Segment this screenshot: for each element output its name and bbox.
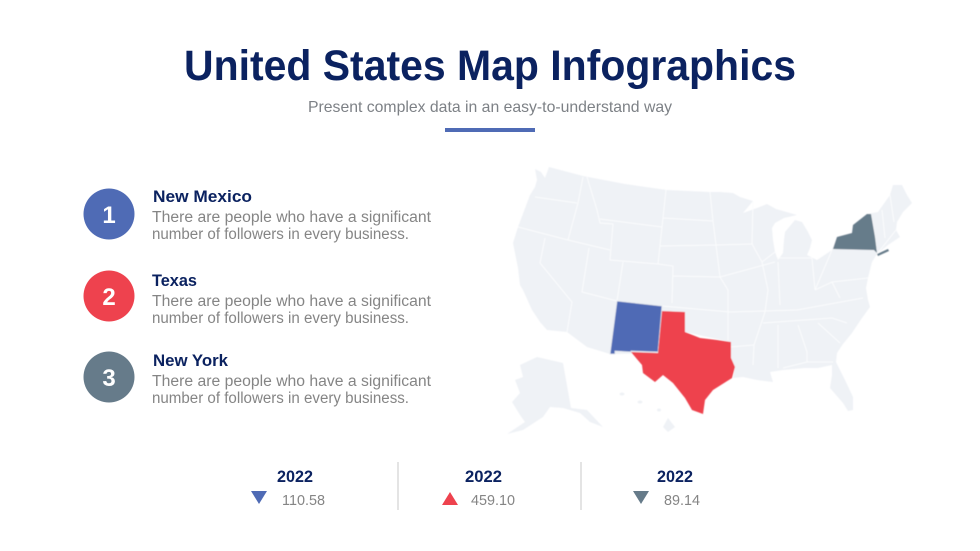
icon: down triangle (251, 491, 267, 504)
stat: New York (633, 467, 700, 509)
stat: New Mexico: 110.58 (282, 492, 325, 509)
title: United States Map Infographics (184, 42, 796, 90)
heading: New York: New York (153, 351, 229, 370)
title underline (445, 128, 535, 132)
state: New York (833, 214, 889, 256)
subtitle: Present complex data in an easy-to-understand way (308, 99, 672, 116)
divider (580, 462, 582, 510)
heading: New Mexico: New Mexico (153, 187, 252, 206)
stat: New York: 89.14 (664, 492, 700, 509)
list item: Texas (84, 270, 432, 327)
badge 2 (84, 270, 134, 322)
badge 1: 1 (102, 202, 116, 229)
icon: down triangle (633, 491, 649, 504)
badge 2: 2 (102, 284, 116, 311)
stat: New Mexico: 2022 (277, 467, 313, 486)
contiguous states base (513, 167, 912, 411)
state: New Mexico (610, 301, 662, 354)
stat: Texas: 2022 (465, 467, 502, 486)
description: number of followers in every business. (152, 310, 409, 327)
badge 3: 3 (102, 365, 116, 392)
stat: New York: 2022 (657, 467, 693, 486)
description: number of followers in every business. (152, 390, 409, 407)
description: There are people who have a significant (152, 209, 432, 226)
badge 1 (84, 188, 134, 240)
stat: Texas (442, 467, 515, 509)
stat: Texas: 459.10 (471, 492, 515, 509)
description: number of followers in every business. (152, 226, 409, 243)
divider (397, 462, 399, 510)
description (152, 373, 432, 407)
Hawaii (620, 392, 675, 432)
state borders (518, 177, 896, 368)
state: Texas (631, 311, 735, 414)
US map (507, 167, 912, 434)
description (152, 293, 432, 327)
description: There are people who have a significant (152, 293, 432, 310)
list item: New Mexico (84, 187, 432, 243)
Alaska (507, 357, 603, 434)
badge 3 (84, 352, 134, 402)
list item: New York (84, 351, 432, 407)
stat: New Mexico (251, 467, 325, 509)
heading: Texas: Texas (152, 271, 197, 290)
icon: up triangle (442, 492, 458, 505)
description: There are people who have a significant (152, 373, 432, 390)
description (152, 209, 432, 243)
